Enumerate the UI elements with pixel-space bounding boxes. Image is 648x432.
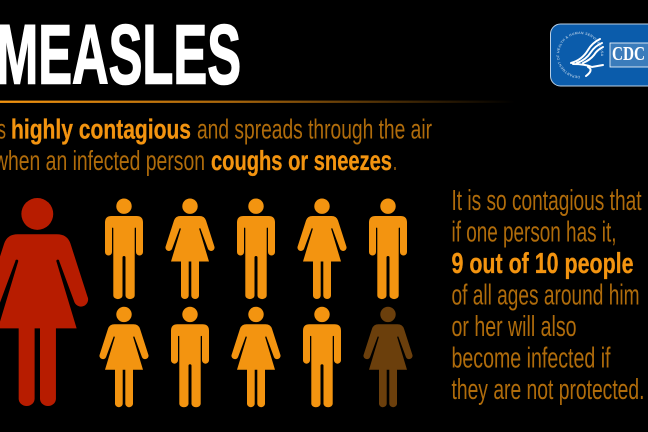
intro text: when an infected person: [0, 145, 205, 176]
eagle: [571, 39, 603, 76]
pictogram: row one of people: [105, 198, 407, 299]
side explanation text: or her will also: [452, 311, 576, 343]
title divider rule: [0, 101, 515, 103]
CDC box: [610, 43, 648, 67]
pictogram: row two of people: [99, 307, 413, 407]
intro text: .: [393, 145, 397, 176]
intro text: coughs or sneezes: [211, 145, 392, 176]
icon: large red woman: [0, 198, 88, 406]
logo: HHS and CDC: [550, 24, 648, 86]
side explanation text: [452, 185, 644, 406]
title: MEASLES: [0, 8, 241, 102]
seal ring text: DEPARTMENT OF HEALTH & HUMAN SERVICES USA: [556, 32, 604, 78]
intro text: highly contagious: [11, 113, 191, 144]
intro text: and spreads through the air: [197, 113, 432, 144]
intro text: [0, 113, 432, 176]
